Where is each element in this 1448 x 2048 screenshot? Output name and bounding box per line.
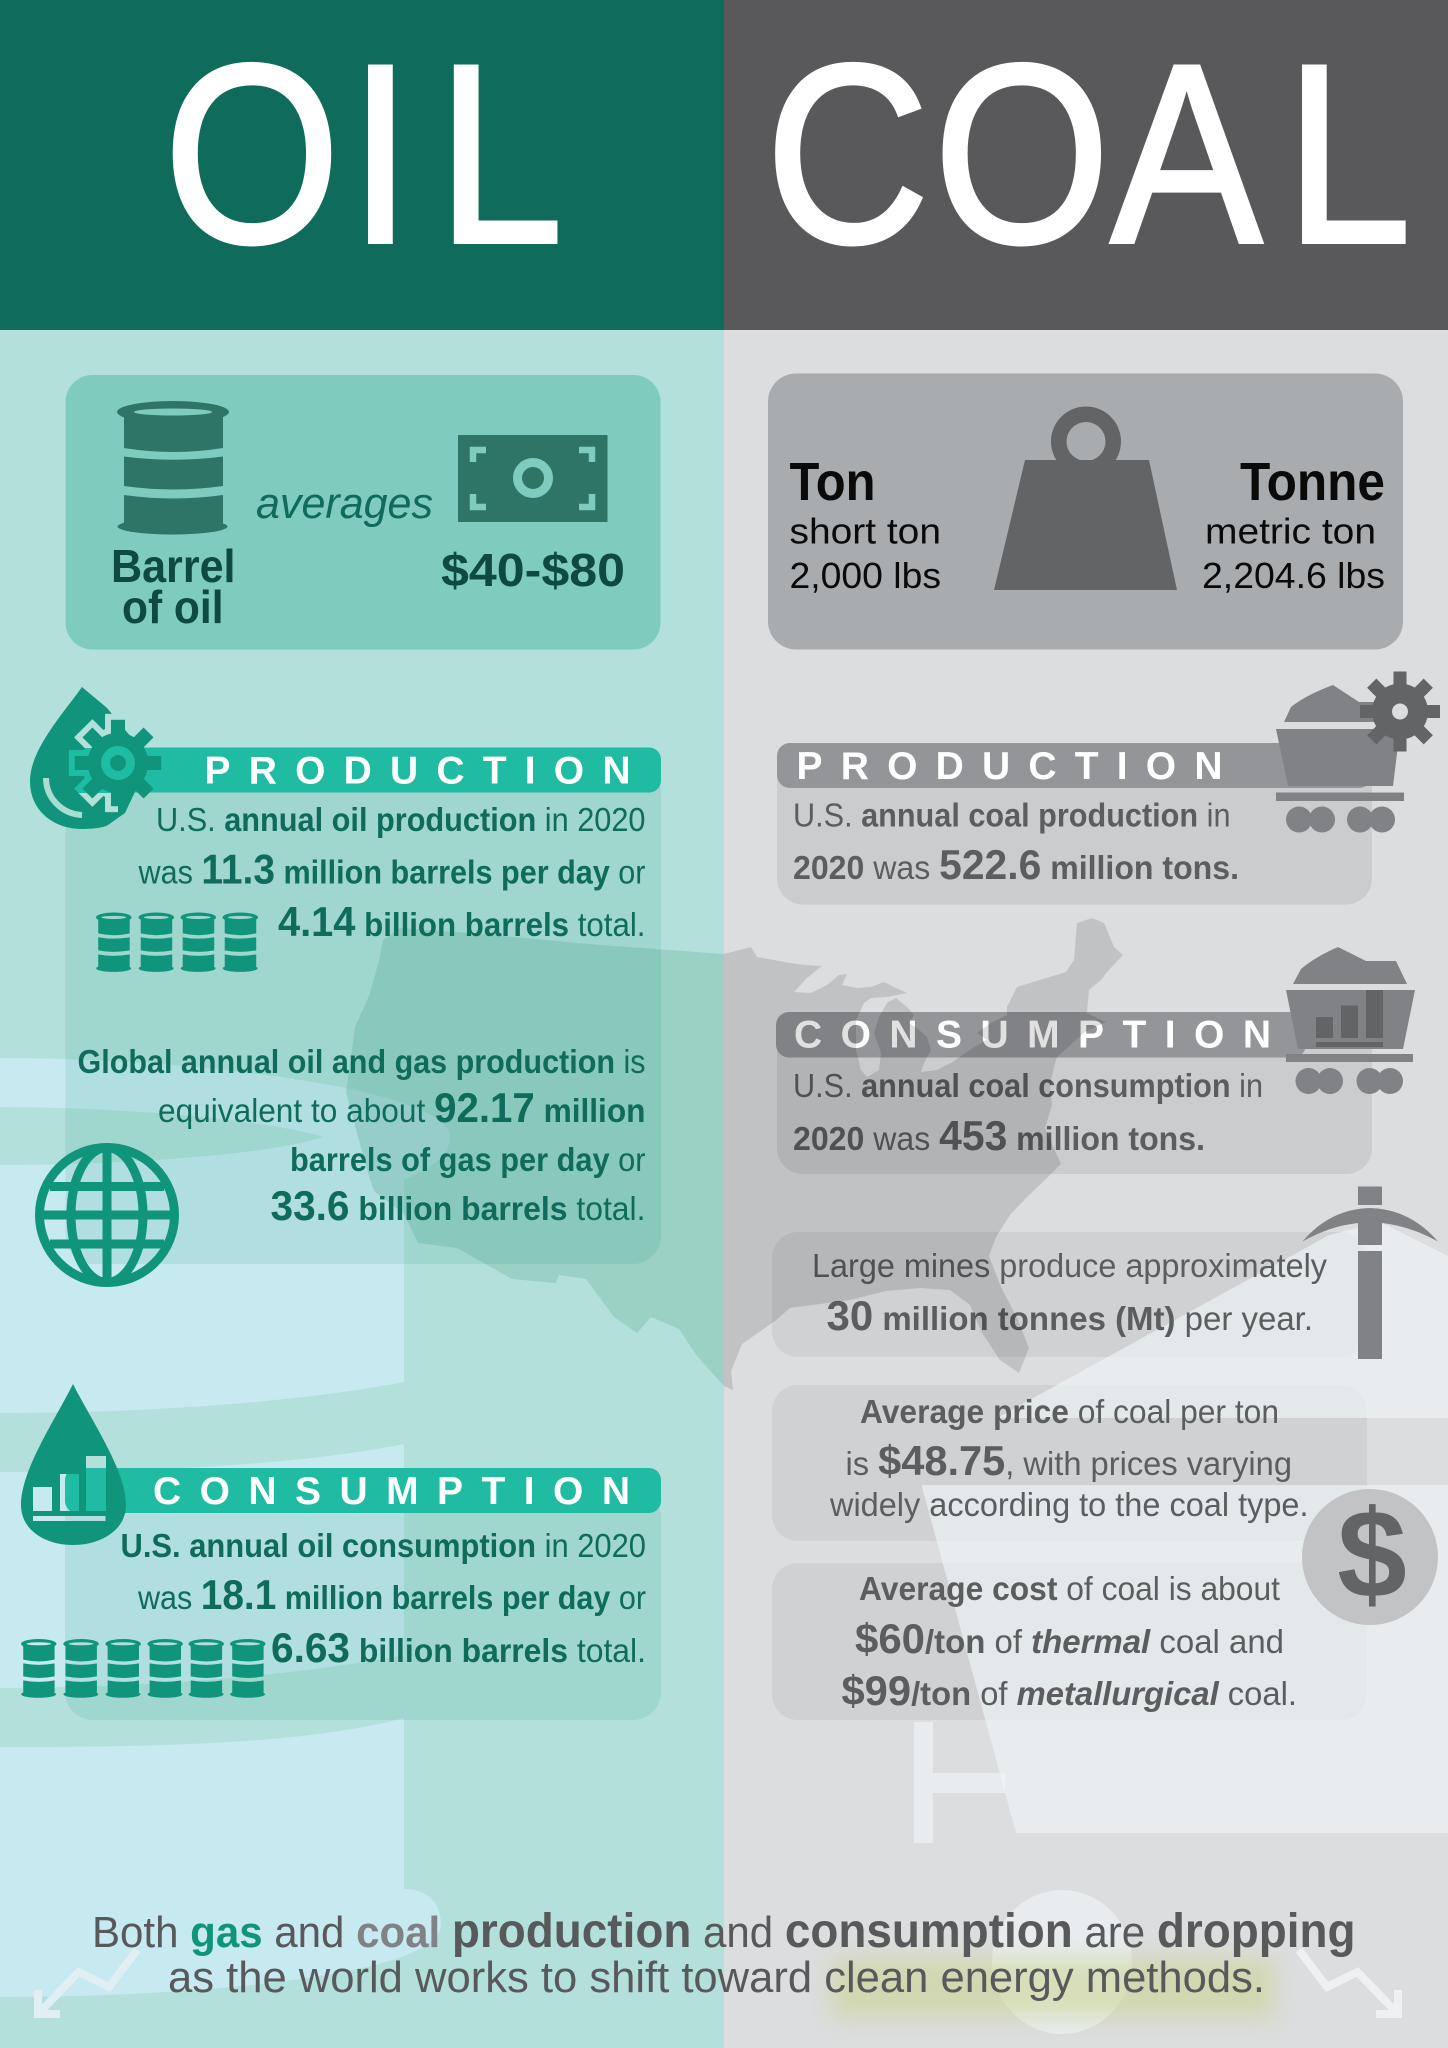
panel: average cost: [772, 1563, 1367, 1720]
averages label: averages: [256, 479, 433, 528]
icon: oil drop with gear: [30, 687, 161, 829]
barrel of oil label: of oil: [122, 581, 224, 633]
text: us oil consumption: was 18.1 million barrels per day or: [137, 1571, 646, 1618]
icon: coal cart with bars: [1286, 947, 1415, 1094]
heading: consumption: CONSUMPTION: [153, 1470, 630, 1513]
icon: pickaxe: [1302, 1186, 1438, 1359]
text: global production: barrels of gas per day or: [290, 1141, 646, 1178]
header: coal: [724, 0, 1448, 330]
text: coal production: 2020 was 522.6 million tons.: [793, 841, 1239, 888]
text: global production: equivalent to about 92.17 million: [158, 1084, 645, 1131]
text: us oil production: was 11.3 million barrels per day or: [138, 846, 646, 892]
ton text: 2,000 lbs: [790, 555, 941, 596]
barrel of oil label: Barrel: [111, 540, 236, 592]
icon: coal cart with gear: [1276, 672, 1440, 832]
heading: coal consumption: CONSUMPTION: [794, 1014, 1271, 1056]
text: global production: Global annual oil and gas production is: [78, 1043, 646, 1080]
text: us oil consumption: 6.63 billion barrels total.: [271, 1624, 646, 1671]
panel: average price: [772, 1385, 1367, 1541]
title: oil: OIL: [164, 12, 563, 297]
panel: coal consumption: [776, 1012, 1372, 1174]
coal column background: [724, 0, 1448, 2048]
tonne text: Tonne: [1240, 452, 1385, 512]
icon: barrel: [117, 401, 229, 534]
text: us oil production: 4.14 billion barrels total.: [278, 898, 646, 945]
text: large mines: [812, 1247, 1327, 1339]
background giant coal cart: [914, 1222, 1448, 2034]
price range: $40-$80: [441, 544, 625, 596]
text: average cost: [842, 1570, 1297, 1714]
yellow glow: [832, 1958, 1274, 2018]
text: us oil production: U.S. annual oil production in 2020: [156, 801, 646, 838]
icon: falling arrow left: [38, 1950, 137, 2014]
text: average price: [829, 1393, 1308, 1523]
background giant barrel: [0, 1058, 450, 1997]
tonne text: 2,204.6 lbs: [1202, 555, 1385, 596]
panel: barrel price: [66, 375, 660, 650]
heading: production: PRODUCTION: [204, 750, 630, 792]
header: oil: [0, 0, 724, 330]
text: global production: 33.6 billion barrels total.: [270, 1182, 646, 1229]
footer statement: Both gas and coal production and consumption are dropping: [92, 1905, 1356, 1958]
ton text: short ton: [790, 510, 941, 552]
tonne text: [1202, 452, 1385, 596]
text: coal production: U.S. annual coal production in: [793, 796, 1230, 834]
icon: weight: [994, 406, 1177, 590]
text: us oil production: [138, 801, 646, 945]
text: large mines: Large mines produce approximately: [812, 1247, 1327, 1284]
text: average cost: $60/ton of thermal coal and: [855, 1615, 1284, 1662]
US map coal side: [724, 918, 1123, 1390]
text: average price: widely according to the coal type.: [829, 1486, 1308, 1523]
icon: banknote: [458, 435, 608, 522]
icon: falling arrow right: [1299, 1950, 1398, 2014]
panel: large mines: [772, 1232, 1366, 1357]
text: average price: Average price of coal per ton: [860, 1393, 1279, 1430]
text: average cost: Average cost of coal is about: [859, 1570, 1280, 1607]
panel: oil production: [66, 765, 661, 1264]
barrel of oil label: [111, 540, 236, 633]
text: coal consumption: [793, 1067, 1263, 1159]
text: coal production: [793, 796, 1239, 888]
icon row: six barrels: [21, 1639, 266, 1698]
text: large mines: 30 million tonnes (Mt) per year.: [826, 1292, 1313, 1339]
text: coal consumption: U.S. annual coal consumption in: [793, 1067, 1263, 1104]
text: average price: is $48.75, with prices varying: [846, 1437, 1292, 1484]
panel: coal production: [777, 743, 1372, 904]
icon: globe: [38, 1147, 176, 1283]
panel: ton vs tonne: [768, 374, 1403, 650]
icon: dollar coin: $: [1337, 1485, 1407, 1624]
US map oil side: [346, 928, 724, 1386]
panel: oil consumption: [65, 1490, 661, 1720]
title: coal: COAL: [765, 12, 1411, 297]
footer statement: [92, 1905, 1356, 2002]
tonne text: metric ton: [1205, 510, 1376, 552]
footer statement: as the world works to shift toward clean energy methods.: [168, 1953, 1265, 2002]
ton text: [790, 452, 941, 596]
production banner oil: [65, 748, 661, 792]
ton text: Ton: [790, 452, 876, 512]
text: average cost: $99/ton of metallurgical coal.: [842, 1667, 1297, 1714]
icon: oil drop with bars: [21, 1384, 126, 1545]
icon row: four barrels: [96, 912, 258, 972]
icon: dollar coin: [1302, 1485, 1438, 1625]
text: global production: [78, 1043, 646, 1229]
text: us oil consumption: [120, 1527, 646, 1671]
oil column background: [0, 0, 724, 2048]
text: coal consumption: 2020 was 453 million tons.: [793, 1112, 1205, 1159]
text: us oil consumption: U.S. annual oil consumption in 2020: [120, 1527, 646, 1564]
consumption banner oil: [65, 1468, 661, 1513]
heading: coal production: PRODUCTION: [796, 745, 1222, 788]
